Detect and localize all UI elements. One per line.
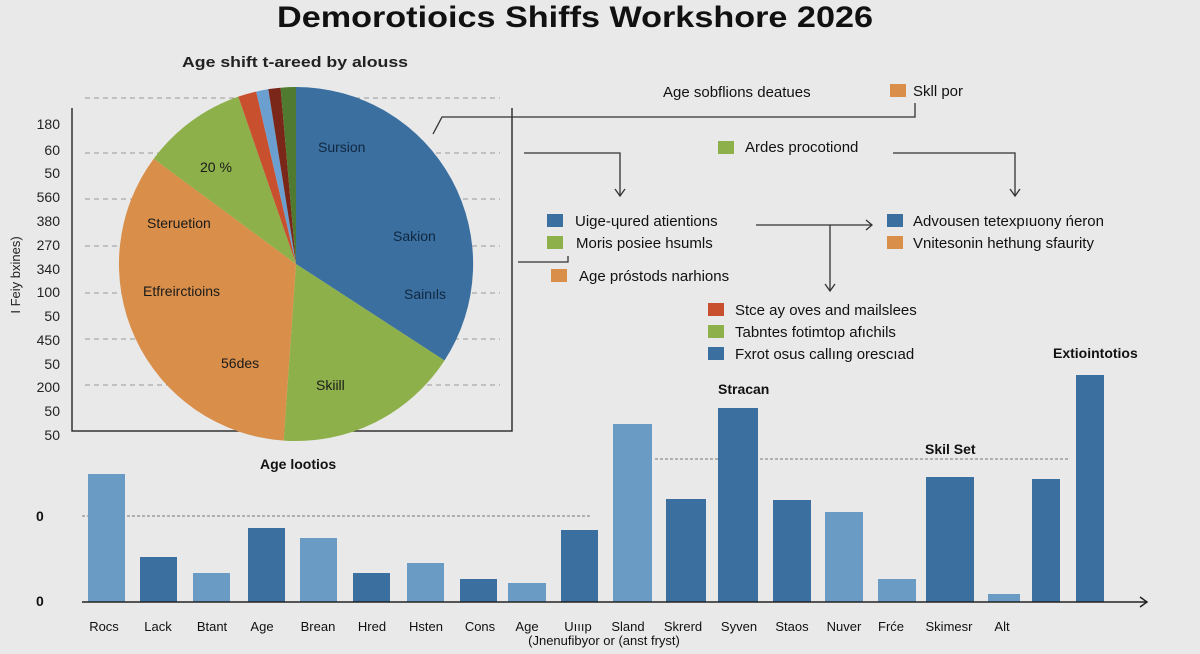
bar chart: Staos xyxy=(775,619,809,634)
bar chart: Age lootios xyxy=(260,456,336,472)
y axis labels xyxy=(37,116,60,443)
legend: lower: Fxrot osus callıng orescıad xyxy=(735,346,914,363)
bar chart: 0 xyxy=(36,508,44,524)
y axis labels: 100 xyxy=(37,284,60,300)
legend: middle right xyxy=(887,213,1104,252)
bar chart: Age xyxy=(515,619,539,634)
y axis labels: 270 xyxy=(37,237,60,253)
bar chart: (Jnenufibyor or (anst fryst) xyxy=(528,633,680,648)
y axis title: I Feiy bxines) xyxy=(8,236,23,314)
bar chart: Sland xyxy=(611,619,645,634)
pie chart heading: Age shift t-areed by alouss xyxy=(182,54,408,71)
bar chart: Hsten xyxy=(409,619,443,634)
y axis labels: 50 xyxy=(44,356,60,372)
pie chart panel: 20 % xyxy=(200,159,232,175)
bar chart: Lack xyxy=(144,619,172,634)
bar chart: Hred xyxy=(358,619,386,634)
y axis labels: 200 xyxy=(37,379,60,395)
bar chart: Stracan xyxy=(718,381,769,397)
pie chart panel: 56des xyxy=(221,355,259,371)
bar chart: Brean xyxy=(301,619,335,634)
y axis labels: 50 xyxy=(44,403,60,419)
bar chart: 0 xyxy=(36,593,44,609)
legend: lower: Tabntes fotimtop afıchils xyxy=(735,324,896,341)
legend: lower xyxy=(708,302,917,363)
y axis labels: 340 xyxy=(37,261,60,277)
pie chart panel: Steruetion xyxy=(147,215,211,231)
y axis labels: 60 xyxy=(44,142,60,158)
pie chart panel xyxy=(8,54,512,443)
bar chart: Cons xyxy=(465,619,496,634)
y axis labels: 50 xyxy=(44,427,60,443)
pie chart panel: Sakion xyxy=(393,228,436,244)
y axis labels: 50 xyxy=(44,308,60,324)
y axis labels: 380 xyxy=(37,213,60,229)
connector lines xyxy=(433,103,1020,291)
bar chart: Rocs xyxy=(89,619,119,634)
bar chart: Btant xyxy=(197,619,228,634)
legend: middle right: Vnitesonin hethung sfaurity xyxy=(913,235,1094,252)
bar chart: Frće xyxy=(878,619,904,634)
legend: middle left: Moris posiee hsumls xyxy=(576,235,713,252)
legend: top: Age sobflions deatues xyxy=(663,84,811,101)
legend: lower: Stce ay oves and mailslees xyxy=(735,302,917,319)
legend: top: Skll por xyxy=(913,83,963,100)
bar chart: Uıııp xyxy=(564,619,592,634)
legend: middle left: Uige-ɥured atientions xyxy=(575,213,718,230)
pie chart panel: Sursion xyxy=(318,139,365,155)
y axis labels: 450 xyxy=(37,332,60,348)
pie chart panel: Skiill xyxy=(316,377,345,393)
pie xyxy=(119,87,473,441)
bar chart: Alt xyxy=(994,619,1010,634)
y axis labels: 560 xyxy=(37,189,60,205)
y axis labels: 50 xyxy=(44,165,60,181)
bar chart xyxy=(36,345,1147,648)
legend: middle left: Age próstods narhions xyxy=(579,268,729,285)
bar chart: Extiointotios xyxy=(1053,345,1138,361)
bar chart: Nuver xyxy=(827,619,862,634)
title: Demorotioics Shiffs Workshore 2026 xyxy=(277,1,873,34)
bar chart: Age xyxy=(250,619,274,634)
legend: top xyxy=(663,83,963,156)
bar chart: Skrerd xyxy=(664,619,702,634)
legend: middle left xyxy=(547,213,729,285)
legend: middle right: Advousen tetexpıuony ńeron xyxy=(913,213,1104,230)
legend: top: Ardes procotiond xyxy=(745,139,858,156)
bar chart: Skil Set xyxy=(925,441,976,457)
pie chart panel: Sainıls xyxy=(404,286,446,302)
bar chart: Syven xyxy=(721,619,757,634)
y axis labels: 180 xyxy=(37,116,60,132)
bar chart: Skimesr xyxy=(926,619,973,634)
pie chart panel: Etfreirctioins xyxy=(143,283,220,299)
